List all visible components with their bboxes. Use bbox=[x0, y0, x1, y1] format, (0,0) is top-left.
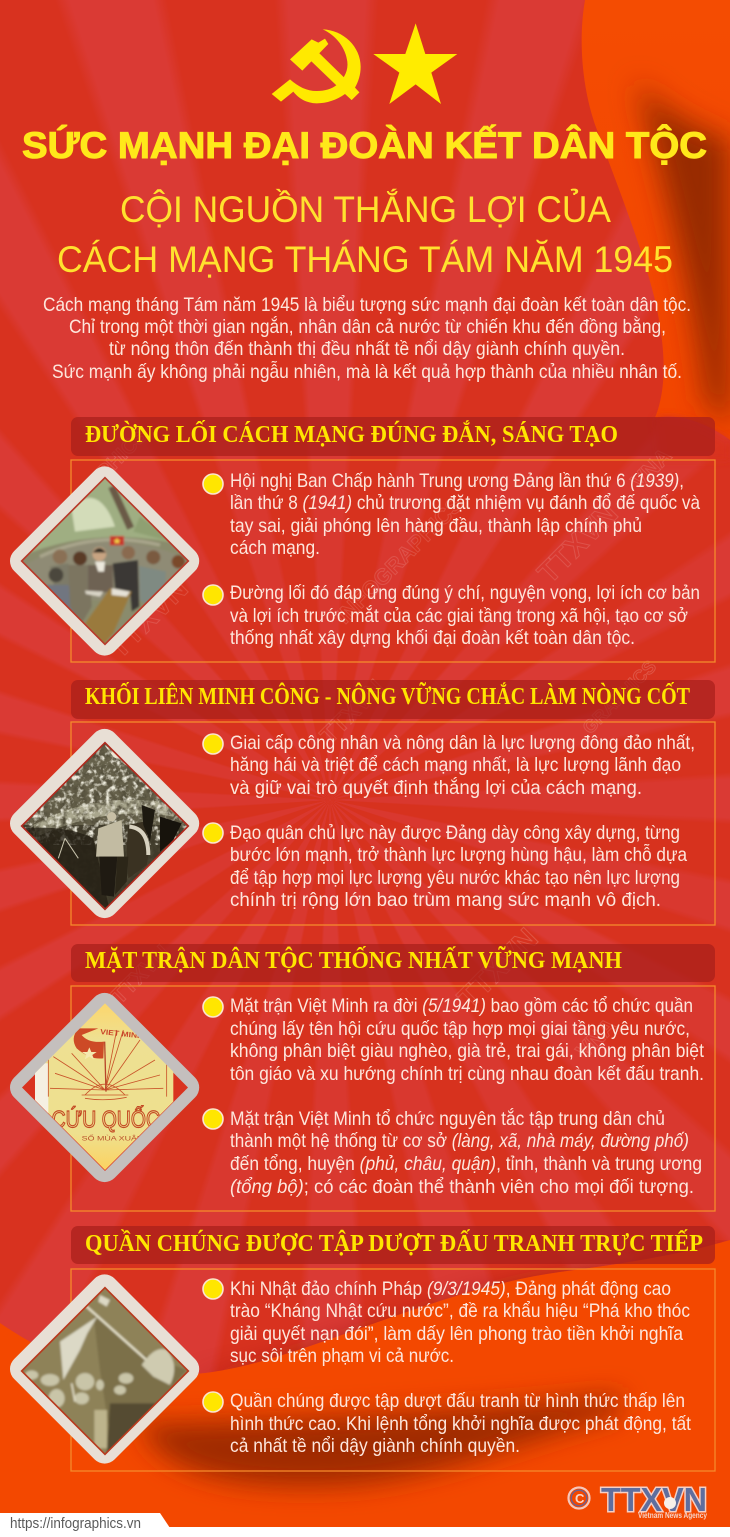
icon: hammer and sickle bbox=[272, 29, 361, 103]
section 2 frame bbox=[71, 722, 715, 925]
bullet 3.2 bbox=[203, 1109, 223, 1129]
watermarks: PHICS bbox=[93, 425, 152, 484]
footer: white strip and url tab: https://infographics.vn bbox=[10, 1515, 141, 1532]
section 3 picture: Cứu Quốc newspaper: CỨU QUỐC bbox=[52, 1105, 160, 1133]
background: orange top-right curtain bbox=[582, 0, 730, 460]
bullet 3.1 bbox=[203, 997, 223, 1017]
bullet 4.1 bbox=[203, 1279, 223, 1299]
text 2.2 bbox=[230, 822, 687, 911]
text 1.1: cách mạng. bbox=[230, 537, 320, 559]
text 1.2 bbox=[230, 582, 700, 649]
text 3.2: đến tổng, huyện (phủ, châu, quận), tỉnh, thành và trung ương bbox=[230, 1153, 702, 1175]
watermarks: TTXVN bbox=[102, 572, 194, 665]
text 4.1 bbox=[230, 1278, 690, 1367]
text 2.1 bbox=[230, 732, 695, 799]
section 2 heading bbox=[71, 680, 715, 719]
icon: yellow star bbox=[373, 23, 457, 104]
text 4.1: Khi Nhật đảo chính Pháp (9/3/1945), Đảng phát động cao bbox=[230, 1278, 671, 1300]
logo: TTXVN: C bbox=[575, 1491, 585, 1506]
watermarks: VNA bbox=[626, 443, 676, 494]
section 3 picture: Cứu Quốc newspaper bbox=[10, 992, 200, 1182]
logo: TTXVN: Vietnam News Agency bbox=[638, 1511, 707, 1520]
section 1 picture: painting of the meeting bbox=[10, 466, 200, 656]
subtitle: CÁCH MẠNG THÁNG TÁM NĂM 1945 bbox=[57, 239, 673, 280]
watermarks: INFOGRAPHICS bbox=[331, 492, 468, 629]
text 4.2: Quần chúng được tập dượt đấu tranh từ hình thức thấp lên bbox=[230, 1390, 685, 1412]
bullet 1.2 bbox=[203, 585, 223, 605]
section 3 heading bbox=[71, 944, 715, 982]
section 3 picture: Cứu Quốc newspaper: VIET MINH bbox=[100, 1027, 144, 1041]
text 2.1: và giữ vai trò quyết định thắng lợi của cách mạng. bbox=[230, 776, 642, 799]
watermarks: TTXVN bbox=[452, 922, 544, 1015]
text 1.2: thống nhất xây dựng khối đại đoàn kết toàn dân tộc. bbox=[230, 627, 635, 649]
title: SỨC MẠNH ĐẠI ĐOÀN KẾT DÂN TỘC bbox=[22, 124, 707, 166]
panel: section 2 bbox=[4, 680, 715, 925]
text 3.2: thành một hệ thống từ cơ sở (làng, xã, nhà máy, đường phố) bbox=[230, 1130, 689, 1152]
watermarks: VNA bbox=[571, 1013, 621, 1064]
watermarks: TTXVN bbox=[532, 497, 624, 590]
background: orange bottom sweep bbox=[0, 1240, 730, 1530]
subtitle: CỘI NGUỒN THẮNG LỢI CỦA bbox=[120, 188, 611, 230]
section 1 heading bbox=[71, 417, 715, 456]
text 1.1 bbox=[230, 470, 700, 559]
intro paragraph: từ nông thôn đến thành thị đều nhất tề nổi dậy giành chính quyền. bbox=[109, 338, 625, 360]
text 4.1: sục sôi trên phạm vi cả nước. bbox=[230, 1345, 454, 1367]
text 3.2 bbox=[230, 1107, 702, 1198]
text 4.2: cả nhất tề nổi dậy giành chính quyền. bbox=[230, 1435, 520, 1457]
text 4.2 bbox=[230, 1390, 692, 1457]
text 3.1 bbox=[230, 995, 705, 1085]
section 4 picture: crowd with flag bbox=[10, 1274, 200, 1464]
subtitle bbox=[57, 188, 673, 280]
watermarks: TTXVN bbox=[315, 675, 390, 749]
section 4 frame bbox=[71, 1269, 715, 1471]
text 4.1: giải quyết nạn đói”, làm dấy lên phong trào tiền khởi nghĩa bbox=[230, 1323, 683, 1345]
text 2.2: chính trị rộng lớn bao trùm mang sức mạnh vô địch. bbox=[230, 889, 661, 911]
text 3.2: (tổng bộ); có các đoàn thể thành viên cho mọi đối tượng. bbox=[230, 1176, 694, 1198]
section 3 picture: Cứu Quốc newspaper: SỐ MÙA XUÂN bbox=[82, 1133, 144, 1143]
section 3 heading: MẶT TRẬN DÂN TỘC THỐNG NHẤT VỮNG MẠNH bbox=[85, 947, 622, 974]
watermarks: GRAPHICS bbox=[579, 657, 660, 738]
bullet 1.1 bbox=[203, 474, 223, 494]
bullet 2.2 bbox=[203, 823, 223, 843]
bullet 4.2 bbox=[203, 1392, 223, 1412]
section 4 heading bbox=[71, 1226, 715, 1264]
panel: section 3 bbox=[4, 944, 715, 1211]
panel: section 4 bbox=[4, 1226, 715, 1471]
watermarks bbox=[93, 425, 676, 1064]
text 2.1: hăng hái và triệt để cách mạng nhất, là lực lượng lãnh đạo bbox=[230, 754, 681, 776]
section 2 picture: troops in the forest bbox=[10, 728, 200, 918]
section 1 frame bbox=[71, 460, 715, 662]
text 3.2: Mặt trận Việt Minh tổ chức nguyên tắc tập trung dân chủ bbox=[230, 1107, 665, 1130]
text 1.1: tay sai, giải phóng lên hàng đầu, thành lập chính phủ bbox=[230, 515, 642, 537]
footer: white strip and url tab bbox=[0, 1513, 730, 1537]
section 4 heading: QUẦN CHÚNG ĐƯỢC TẬP DƯỢT ĐẤU TRANH TRỰC TIẾP bbox=[85, 1230, 703, 1257]
logo: TTXVN: TTXVN bbox=[601, 1481, 707, 1518]
section 1 heading: ĐƯỜNG LỐI CÁCH MẠNG ĐÚNG ĐẮN, SÁNG TẠO bbox=[85, 421, 618, 448]
text 3.1: Mặt trận Việt Minh ra đời (5/1941) bao gồm các tổ chức quần bbox=[230, 995, 693, 1017]
section 3 frame bbox=[71, 986, 715, 1211]
panel: section 1 bbox=[4, 417, 715, 662]
watermarks: TTXVN bbox=[106, 940, 175, 1009]
intro paragraph bbox=[43, 294, 691, 383]
text 1.1: Hội nghị Ban Chấp hành Trung ương Đảng lần thứ 6 (1939), bbox=[230, 470, 684, 492]
intro paragraph: Chỉ trong một thời gian ngắn, nhân dân cả nước từ chiến khu đến đồng bằng, bbox=[69, 315, 666, 338]
bullet 2.1 bbox=[203, 734, 223, 754]
